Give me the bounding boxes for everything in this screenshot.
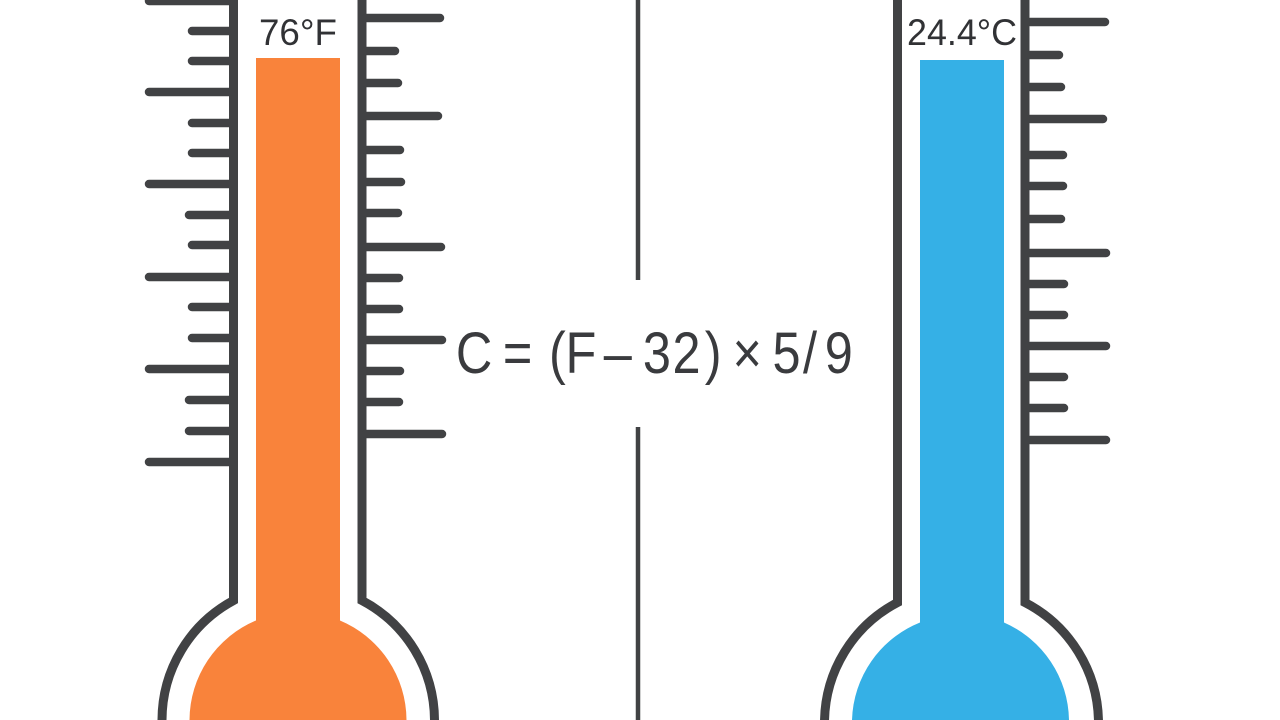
thermometer outline [162, 0, 434, 720]
left scale ticks [149, 1, 230, 462]
formula: 3 [643, 321, 671, 386]
right scale ticks [1030, 22, 1106, 440]
formula: / [803, 321, 818, 386]
thermometer: Celsius [824, 0, 1106, 720]
thermometer: Fahrenheit [149, 0, 442, 720]
formula: – [604, 321, 633, 386]
label: 76°F: 76°F [259, 12, 337, 53]
thermometer outline [824, 0, 1098, 720]
formula: F [566, 321, 596, 386]
formula: = [503, 321, 532, 386]
formula: × [733, 321, 762, 386]
label: 24.4°C: 24.4°C [907, 12, 1017, 53]
formula: C [456, 321, 492, 386]
right scale ticks [366, 18, 442, 434]
formula: ( [549, 321, 566, 386]
mercury: orange fill [190, 58, 406, 720]
formula: 5 [773, 321, 801, 386]
formula: 2 [673, 321, 701, 386]
formula: 9 [825, 321, 853, 386]
formula: ) [705, 321, 722, 386]
mercury: blue fill [852, 60, 1069, 720]
divider line [636, 0, 640, 720]
